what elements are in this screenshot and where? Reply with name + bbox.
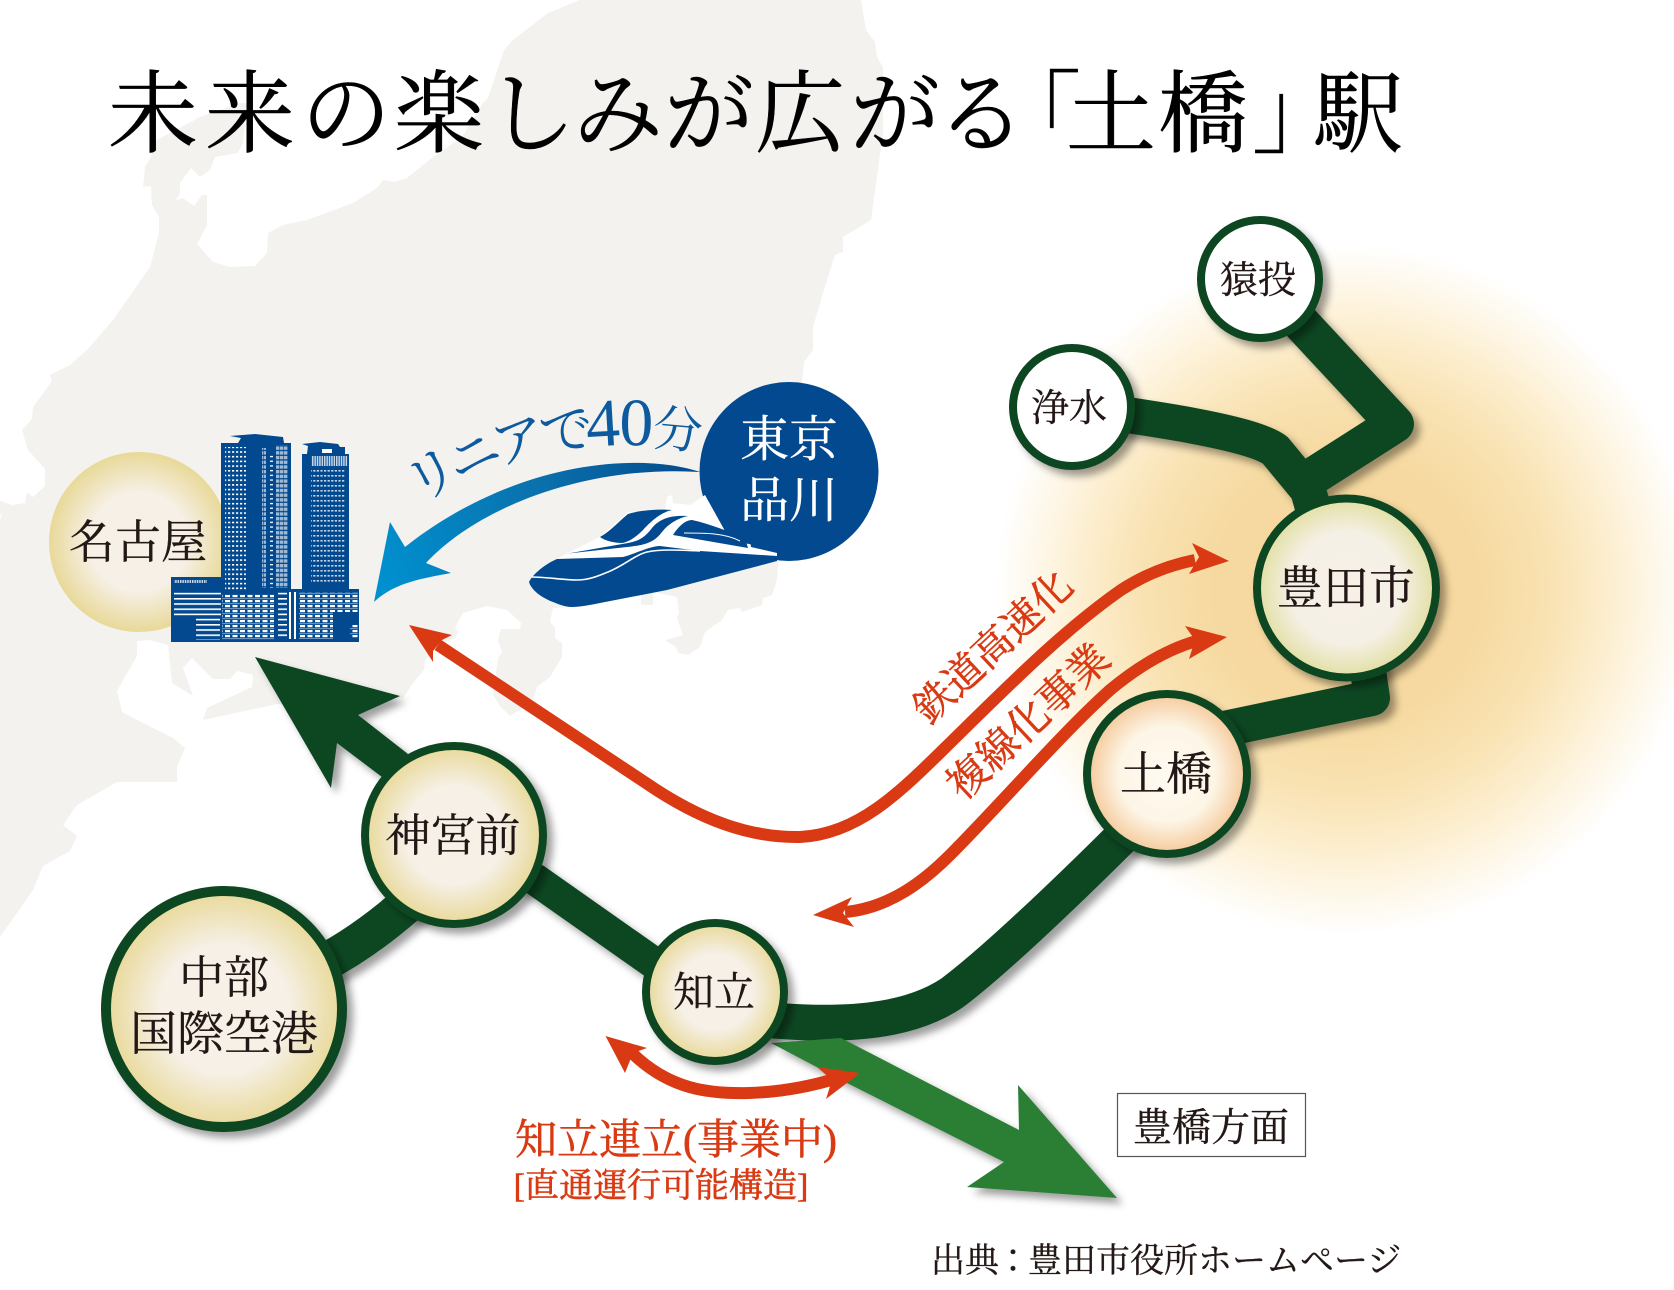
station: Chiryu: 知立 <box>673 969 755 1015</box>
label box: toward Toyohashi: 豊橋方面 <box>1133 1107 1289 1150</box>
station: Nagoya <box>49 452 229 632</box>
rail network <box>255 279 1395 1023</box>
station: Nagoya: 名古屋 <box>69 517 207 568</box>
station: Sanage <box>1201 220 1319 338</box>
station: Jingu-mae: 神宮前 <box>385 811 521 861</box>
label: double tracking: 複線化事業 <box>938 635 1119 808</box>
label: Chiryu elevated project: 知立連立(事業中) <box>515 1118 837 1164</box>
station: Tokyo Shinagawa: 品川 <box>740 473 838 528</box>
station: Josui: 浄水 <box>1031 388 1107 430</box>
station: Josui <box>1013 348 1131 466</box>
station: Dobashi: 土橋 <box>1120 749 1212 800</box>
station: Chiryu <box>646 923 784 1061</box>
arrow: Tokyo to Nagoya <box>374 463 700 602</box>
text: linear 40 minutes: リニアで40分 <box>411 400 702 498</box>
line: Dobashi to Chiryu <box>715 827 1132 1023</box>
station: Toyota city <box>1257 498 1436 678</box>
arrow: double track arrow <box>813 626 1227 927</box>
station: Sanage: 猿投 <box>1220 260 1296 302</box>
title: 未来の楽しみが広がる「土橋」駅 <box>108 66 1403 165</box>
background map of Japan <box>0 0 883 937</box>
station: Centrair airport: 国際空港 <box>130 1009 318 1061</box>
glow around Toyota city <box>996 245 1674 935</box>
icon: Nagoya towers <box>171 434 359 642</box>
source note: 出典：豊田市役所ホームページ <box>931 1242 1401 1280</box>
label: through-service structure: [直通運行可能構造] <box>514 1167 808 1205</box>
label: railway speed-up: 鉄道高速化 <box>905 562 1082 732</box>
station: Jingu-mae <box>365 746 543 924</box>
line: Sanage branch <box>1260 279 1395 491</box>
line: Toyota to Dobashi <box>1167 630 1372 774</box>
arrow: toward Nagoya <box>255 657 408 788</box>
line: Chiryu to Jingu-mae <box>454 835 654 963</box>
line: Josui branch <box>1072 407 1322 540</box>
arrow: long red speed-up arrow <box>409 543 1229 837</box>
line: Centrair to Jingu-mae <box>320 888 425 965</box>
station: Dobashi <box>1087 694 1247 854</box>
station: Tokyo Shinagawa: 東京 <box>740 412 838 467</box>
icon: linear train <box>529 495 777 607</box>
label box: toward Toyohashi <box>1118 1094 1306 1156</box>
arrow: toward Toyohashi <box>771 1038 1117 1198</box>
station: Toyota city: 豊田市 <box>1277 563 1415 614</box>
station: Centrair airport: 中部 <box>179 953 269 1003</box>
station: Tokyo Shinagawa <box>700 382 878 561</box>
station: Centrair airport <box>106 891 342 1127</box>
arrow: Chiryu elevated arrow <box>606 1036 860 1099</box>
